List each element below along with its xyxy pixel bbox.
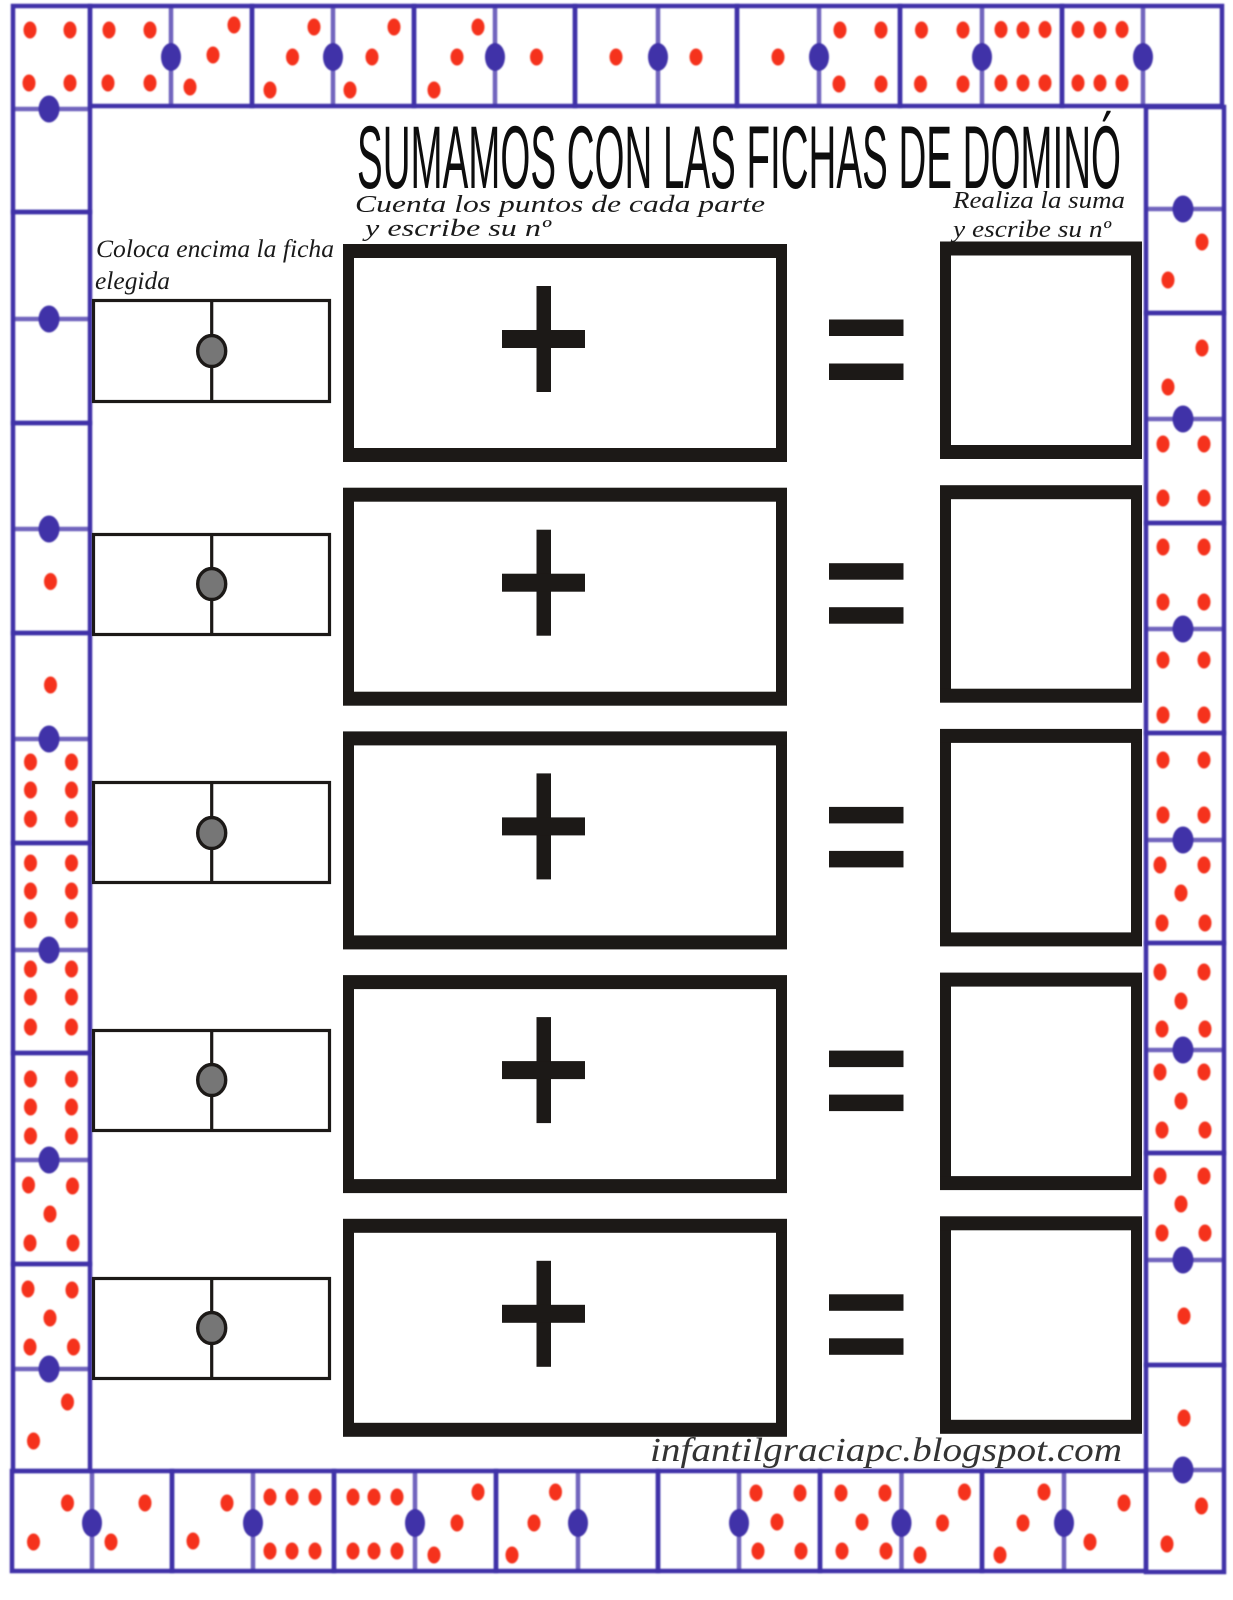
tile: blank and blank — [13, 212, 90, 423]
tile: one and six — [13, 633, 90, 843]
equals sign — [829, 563, 904, 624]
addition box — [343, 488, 787, 706]
addition box — [343, 731, 787, 949]
instruction: choose tile — [95, 236, 334, 295]
tile: blank and one — [13, 423, 90, 633]
answer box — [940, 729, 1142, 946]
tile: five and one — [1146, 1153, 1224, 1365]
tile: four and four — [1146, 523, 1224, 733]
empty domino placeholder — [94, 534, 330, 636]
empty domino placeholder — [94, 782, 330, 884]
tile: six and three — [334, 1471, 496, 1571]
row 1 — [94, 242, 1142, 462]
empty domino placeholder — [94, 1278, 330, 1380]
instruction: count the points: y escribe su nº — [362, 216, 552, 242]
top domino row — [90, 6, 1222, 106]
left domino column — [13, 6, 90, 1471]
row 5 — [94, 1216, 1142, 1437]
tile: four and six — [900, 6, 1062, 106]
row 3 — [94, 729, 1142, 949]
tile: one and one — [575, 6, 737, 106]
right domino column — [1146, 107, 1224, 1572]
answer box — [940, 242, 1142, 459]
instruction: choose tile: elegida — [95, 268, 170, 295]
equals sign — [829, 807, 904, 867]
row 4 — [94, 973, 1142, 1193]
equals sign — [829, 1294, 904, 1355]
instruction: do the sum — [951, 188, 1125, 243]
tile: five and two — [13, 1264, 90, 1471]
tile: four and five — [1146, 733, 1224, 943]
tile: six and blank — [1062, 6, 1222, 106]
plus sign — [502, 1017, 585, 1123]
addition box — [343, 1219, 787, 1437]
answer box — [940, 485, 1142, 703]
tile: four and blank — [13, 6, 90, 212]
tile: five and five — [1146, 943, 1224, 1153]
instruction: choose tile: Coloca encima la ficha — [96, 236, 334, 263]
addition box — [343, 244, 787, 462]
plus sign — [502, 286, 585, 392]
answer box — [940, 1216, 1142, 1434]
addition box — [343, 975, 787, 1193]
bottom domino row — [12, 1471, 1146, 1571]
tile: five and three — [820, 1471, 982, 1571]
tile: blank and two — [1146, 107, 1224, 313]
tile: three and three — [252, 6, 414, 106]
tile: three and blank — [496, 1471, 658, 1571]
tile: four and three — [90, 6, 252, 106]
plus sign — [502, 773, 585, 879]
answer box — [940, 973, 1142, 1190]
instruction: do the sum: y escribe su nº — [951, 217, 1112, 243]
empty domino placeholder — [94, 1030, 330, 1132]
tile: three and one — [414, 6, 575, 106]
tile: two and two — [12, 1471, 172, 1571]
tile: two and four — [1146, 313, 1224, 523]
instruction: do the sum: Realiza la suma — [952, 188, 1125, 214]
tile: one and two — [1146, 1365, 1224, 1572]
tile: six and five — [13, 1053, 90, 1264]
equals sign — [829, 320, 904, 380]
equals sign — [829, 1051, 904, 1111]
blog url credit: infantilgraciapc.blogspot.com — [650, 1432, 1122, 1469]
plus sign — [502, 530, 585, 636]
instruction: count the points — [355, 192, 765, 242]
tile: blank and five — [658, 1471, 820, 1571]
tile: two and six — [172, 1471, 334, 1571]
row 2 — [94, 485, 1142, 706]
plus sign — [502, 1261, 585, 1367]
instruction: count the points: Cuenta los puntos de cada parte — [355, 192, 765, 218]
tile: three and two — [982, 1471, 1146, 1571]
tile: six and six — [13, 843, 90, 1053]
empty domino placeholder — [94, 300, 330, 402]
tile: one and four — [737, 6, 900, 106]
